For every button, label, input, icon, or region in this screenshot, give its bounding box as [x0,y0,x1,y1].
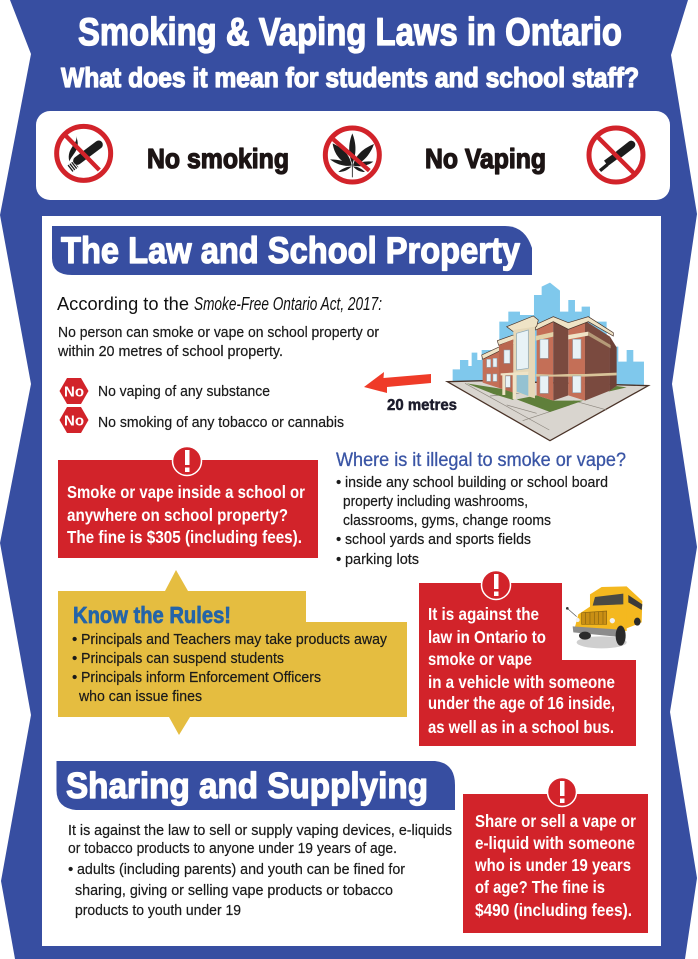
label: 20 metres: 20 metres [387,397,457,414]
panel: no smoking and no vaping strip [36,111,670,200]
icon: No sign two: No [64,412,84,430]
heading: The Law and School Property: The Law and School Property [61,230,520,271]
text block: sharing and supplying law: or tobacco products to anyone under 19 years of age. [68,840,397,857]
text block: according to the act: within 20 metres of school property. [57,343,283,360]
list: no vaping, no smoking: No smoking of any tobacco or cannabis [98,414,344,431]
illustration: school building [447,283,648,441]
text block: according to the act: According to the [57,294,189,314]
callout: fine $490 [463,778,648,933]
callout: fine $490: of age? The fine is [475,877,605,897]
text block: sharing and supplying law: • [68,861,73,878]
callout: know the rules: who can issue fines [78,688,202,705]
illustration: school bus [566,586,642,648]
icon: No sign one [60,378,88,404]
callout: know the rules: Principals and Teachers may take products away [81,631,387,648]
text block: where is it illegal: inside any school building or school board [345,474,608,491]
text block: sharing and supplying law: products to youth under 19 [75,902,241,919]
callout: fine $305: anywhere on school property? [67,505,288,525]
callout: know the rules: Principals inform Enforcement Officers [81,669,321,686]
callout: know the rules: Principals can suspend students [81,650,284,667]
callout: vehicle and school bus [419,570,636,746]
text block: sharing and supplying law: adults (including parents) and youth can be fined for [77,861,405,878]
label: no vaping: No Vaping [425,143,546,174]
text block: where is it illegal: classrooms, gyms, change rooms [343,512,551,529]
icon: exclamation [172,446,202,476]
callout: vehicle and school bus: in a vehicle with someone [428,672,615,692]
icon: no smoking [57,126,111,180]
text block: where is it illegal [336,449,626,568]
text block: where is it illegal: Where is it illegal to smoke or vape? [336,449,626,471]
icon: exclamation [482,570,510,600]
text block: where is it illegal: property including washrooms, [343,493,528,510]
icon: No sign one: No [64,384,84,400]
panel: main content [42,216,661,946]
heading: Sharing and Supplying: Sharing and Supplying [66,765,428,806]
label: no smoking: No smoking [147,143,289,174]
callout: vehicle and school bus: law in Ontario to [428,627,546,647]
text block: where is it illegal: • [336,551,341,568]
text block: where is it illegal: parking lots [345,551,419,568]
text block: according to the act [57,294,382,360]
callout: vehicle and school bus: It is against the [428,604,539,624]
icon: exclamation [548,778,576,806]
callout: know the rules: • [72,631,77,648]
callout: fine $305: Smoke or vape inside a school or [67,482,305,502]
text block: sharing and supplying law: sharing, giving or selling vape products or tobacco [75,882,393,899]
text block: according to the act: Smoke-Free Ontario Act, 2017: [194,294,382,314]
text block: where is it illegal: • [336,531,341,548]
callout: know the rules: • [72,650,77,667]
list: no vaping, no smoking: No vaping of any substance [98,383,270,400]
subtitle: What does it mean for students and school staff? [61,62,639,93]
callout: vehicle and school bus: as well as in a school bus. [428,717,614,737]
icon: no vaping [589,128,643,182]
list: no vaping, no smoking [60,378,344,433]
text block: where is it illegal: school yards and sports fields [345,531,531,548]
icon: no cannabis [325,128,379,182]
text block: according to the act: No person can smoke or vape on school property or [58,324,379,341]
callout: know the rules: • [72,669,77,686]
callout: fine $305: The fine is $305 (including fees). [67,527,302,547]
callout: vehicle and school bus: under the age of 16 inside, [428,693,615,713]
callout: know the rules [58,570,407,735]
icon: No sign two [60,407,88,433]
callout: fine $490: $490 (including fees). [475,900,632,920]
text block: sharing and supplying law: It is against the law to sell or supply vaping devices, e-liquids [68,822,452,839]
arrow: 20 metres [364,372,431,393]
text block: sharing and supplying law [68,822,452,919]
callout: fine $490: who is under 19 years [474,855,631,875]
callout: vehicle and school bus: smoke or vape [428,649,532,669]
callout: fine $490: e-liquid with someone [475,833,635,853]
callout: fine $305 [58,446,318,558]
callout: fine $490: Share or sell a vape or [475,811,636,831]
callout: know the rules: Know the Rules! [73,602,231,628]
text block: where is it illegal: • [336,474,341,491]
